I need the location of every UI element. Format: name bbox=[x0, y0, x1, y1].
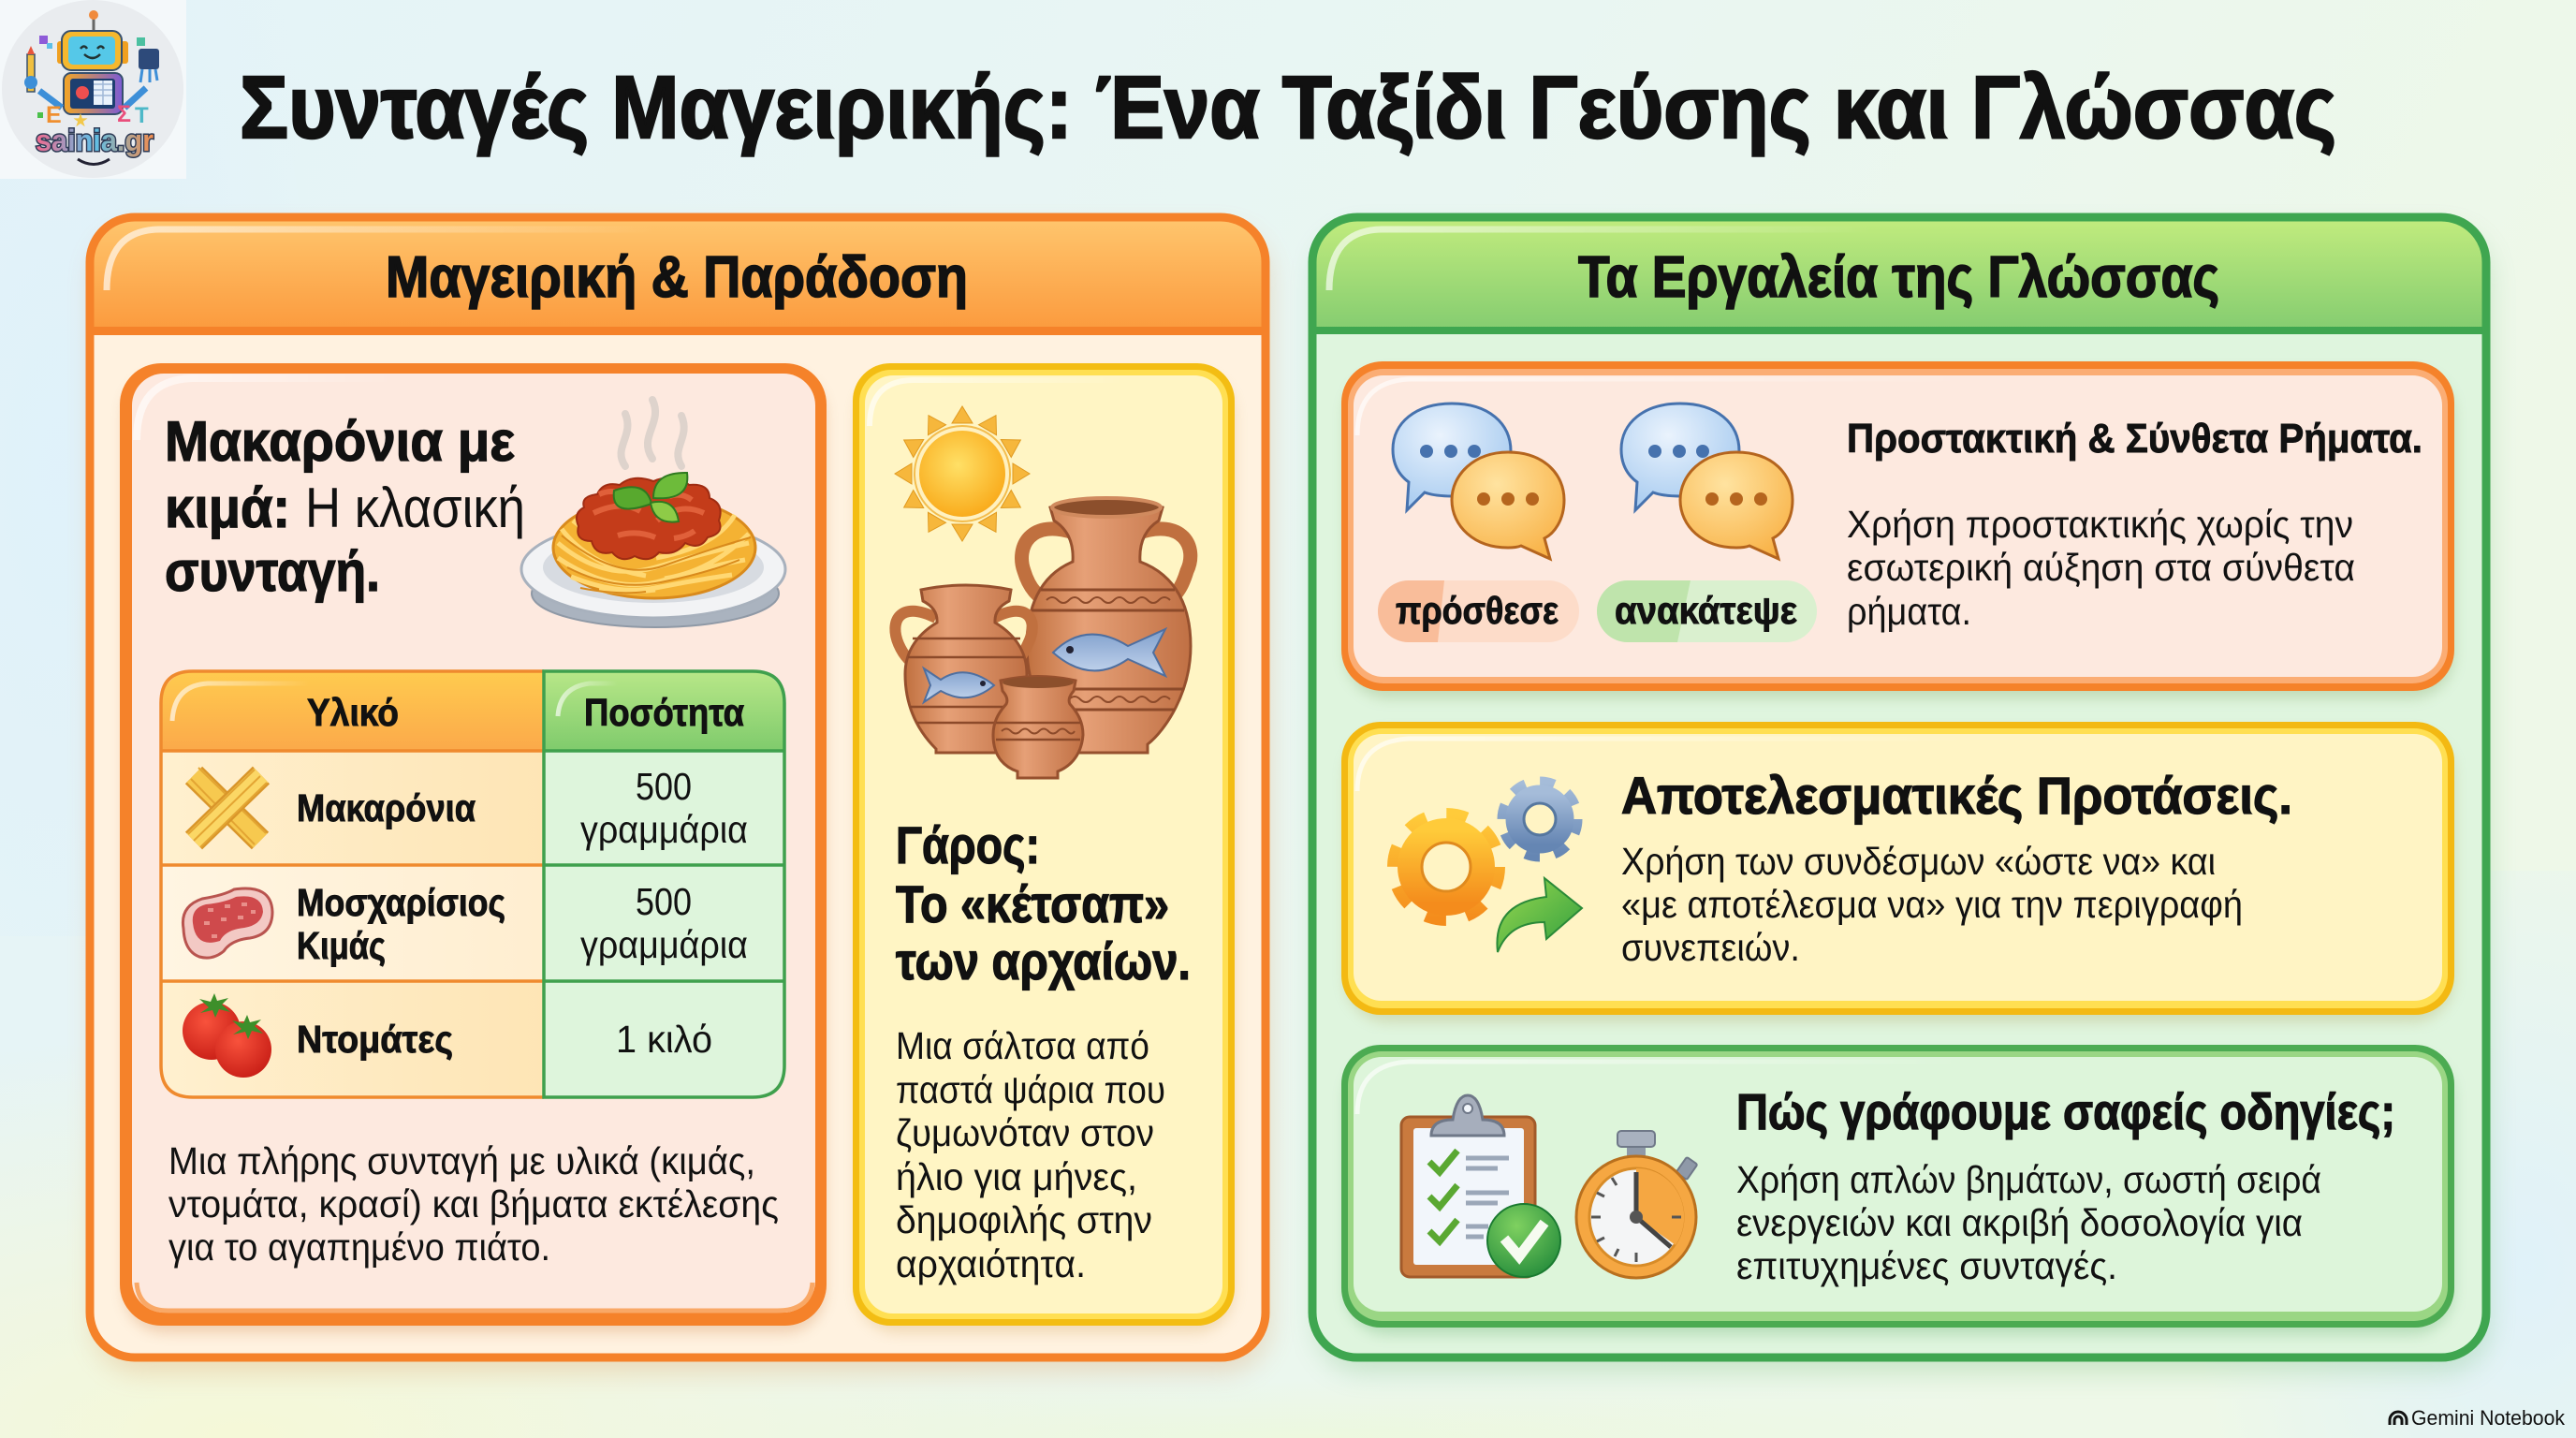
card heading: Η κλασική bbox=[305, 477, 525, 539]
panel: Τα Εργαλεία της Γλώσσας bbox=[1312, 217, 2490, 1372]
card heading: των αρχαίων. bbox=[896, 932, 1191, 990]
card paragraph: ντομάτα, κρασί) και βήματα εκτέλεσης bbox=[168, 1182, 779, 1225]
watermark: Gemini Notebook: Gemini Notebook bbox=[2411, 1406, 2566, 1430]
card heading: Το «κέτσαπ» bbox=[896, 874, 1169, 933]
icon: tomatoes bbox=[183, 993, 271, 1078]
panel: Μαγειρική & Παράδοση bbox=[90, 217, 1269, 1372]
row: Ντομάτες: 1 κιλό bbox=[616, 1018, 712, 1061]
row: Μοσχαρίσιος Κιμάς: Κιμάς bbox=[297, 924, 386, 967]
card paragraph: παστά ψάρια που bbox=[896, 1068, 1165, 1111]
row: Μακαρόνια: γραμμάρια bbox=[580, 808, 748, 851]
card paragraph bbox=[1847, 503, 2355, 633]
card paragraph: Χρήση απλών βημάτων, σωστή σειρά bbox=[1736, 1158, 2321, 1201]
tiny jar bbox=[993, 676, 1083, 778]
card paragraph: εσωτερική αύξηση στα σύνθετα bbox=[1847, 546, 2355, 589]
card paragraph bbox=[896, 1024, 1165, 1285]
logo: sainia.gr robot: Ε bbox=[46, 102, 62, 128]
icon: stopwatch bbox=[1576, 1131, 1697, 1278]
card: Προστακτική & Σύνθετα Ρήματα bbox=[1341, 361, 2454, 698]
title: Συνταγές Μαγειρικής: Ένα Ταξίδι Γεύσης και Γλώσσας bbox=[240, 58, 2336, 157]
icon: sun bbox=[895, 406, 1030, 541]
card paragraph: για το αγαπημένο πιάτο. bbox=[168, 1225, 550, 1269]
card paragraph: επιτυχημένες συνταγές. bbox=[1736, 1244, 2117, 1287]
card heading: Μακαρόνια με bbox=[165, 410, 515, 473]
row: Μακαρόνια: Μακαρόνια bbox=[297, 786, 476, 829]
card paragraph: «με αποτέλεσμα να» για την περιγραφή bbox=[1621, 883, 2243, 926]
small jar bbox=[895, 585, 1032, 753]
row: Μοσχαρίσιος Κιμάς: 500 bbox=[636, 880, 692, 923]
pill: πρόσθεσε: πρόσθεσε bbox=[1396, 589, 1559, 632]
card paragraph bbox=[1736, 1158, 2321, 1287]
icon: crossed pasta bbox=[188, 768, 267, 847]
card paragraph: συνεπειών. bbox=[1621, 926, 1800, 969]
icon: clay jars with fish bbox=[895, 498, 1191, 778]
card heading: κιμά: bbox=[165, 477, 290, 539]
row: Μακαρόνια: 500 bbox=[636, 765, 692, 808]
icon: minced beef bbox=[183, 888, 272, 958]
card heading: Προστακτική & Σύνθετα Ρήματα. bbox=[1847, 416, 2422, 462]
logo: sainia.gr robot: sainia.gr bbox=[36, 124, 154, 157]
card paragraph: ρήματα. bbox=[1847, 590, 1971, 633]
row: Ντομάτες bbox=[183, 993, 712, 1078]
card paragraph: δημοφιλής στην bbox=[896, 1198, 1152, 1241]
logo: sainia.gr robot: Σ bbox=[117, 101, 131, 127]
card paragraph: Μια σάλτσα από bbox=[896, 1024, 1149, 1067]
card paragraph: Μια πλήρης συνταγή με υλικά (κιμάς, bbox=[168, 1139, 755, 1182]
card paragraph: ζυμωνόταν στον bbox=[896, 1111, 1154, 1154]
icon: plate of spaghetti bbox=[521, 400, 785, 627]
icon: gears and arrow bbox=[1395, 783, 1582, 952]
logo: sainia.gr robot bbox=[0, 0, 186, 179]
row: Μακαρόνια bbox=[188, 765, 748, 851]
card: Γάρος bbox=[853, 363, 1235, 1333]
card paragraph: Χρήση προστακτικής χωρίς την bbox=[1847, 503, 2353, 546]
card heading bbox=[165, 410, 525, 603]
card paragraph: αρχαιότητα. bbox=[896, 1242, 1086, 1285]
row: Μοσχαρίσιος Κιμάς bbox=[183, 880, 748, 967]
card: Πώς γράφουμε σαφείς οδηγίες bbox=[1341, 1045, 2454, 1335]
card heading bbox=[896, 815, 1191, 990]
fish bbox=[1053, 629, 1165, 676]
card paragraph: ήλιο για μήνες, bbox=[896, 1155, 1137, 1198]
big jar bbox=[1022, 498, 1191, 753]
card heading: Πώς γράφουμε σαφείς οδηγίες; bbox=[1736, 1084, 2395, 1140]
card: Αποτελεσματικές Προτάσεις bbox=[1341, 722, 2454, 1022]
table header bbox=[307, 691, 744, 734]
row: Μοσχαρίσιος Κιμάς: γραμμάρια bbox=[580, 923, 748, 966]
logo: sainia.gr robot: Τ bbox=[135, 103, 149, 128]
card: Μακαρόνια με κιμά bbox=[120, 363, 827, 1333]
panel heading: Μαγειρική & Παράδοση bbox=[386, 245, 968, 310]
row: Μοσχαρίσιος Κιμάς: Μοσχαρίσιος bbox=[297, 881, 505, 924]
logo: sainia.gr robot: ★ bbox=[73, 113, 88, 129]
card paragraph: Χρήση των συνδέσμων «ώστε να» και bbox=[1621, 840, 2216, 883]
icon: clipboard checklist bbox=[1401, 1095, 1560, 1277]
card paragraph bbox=[168, 1139, 779, 1269]
table header: Υλικό bbox=[307, 691, 399, 734]
card paragraph bbox=[1621, 840, 2243, 969]
icon: speech bubbles 2 bbox=[1621, 404, 1793, 559]
card paragraph: ενεργειών και ακριβή δοσολογία για bbox=[1736, 1201, 2303, 1244]
pill: ανακάτεψε: ανακάτεψε bbox=[1615, 589, 1797, 632]
pill: πρόσθεσε bbox=[1378, 580, 1579, 642]
row: Ντομάτες: Ντομάτες bbox=[297, 1018, 453, 1061]
icon: speech bubbles 1 bbox=[1393, 404, 1564, 559]
panel heading: Τα Εργαλεία της Γλώσσας bbox=[1578, 245, 2219, 310]
card heading: Αποτελεσματικές Προτάσεις. bbox=[1621, 766, 2292, 825]
card heading: Γάρος: bbox=[896, 815, 1040, 874]
pill: ανακάτεψε bbox=[1597, 580, 1817, 642]
table header: Ποσότητα bbox=[584, 691, 744, 734]
table: ingredients bbox=[161, 671, 784, 1097]
card heading: συνταγή. bbox=[165, 540, 380, 603]
